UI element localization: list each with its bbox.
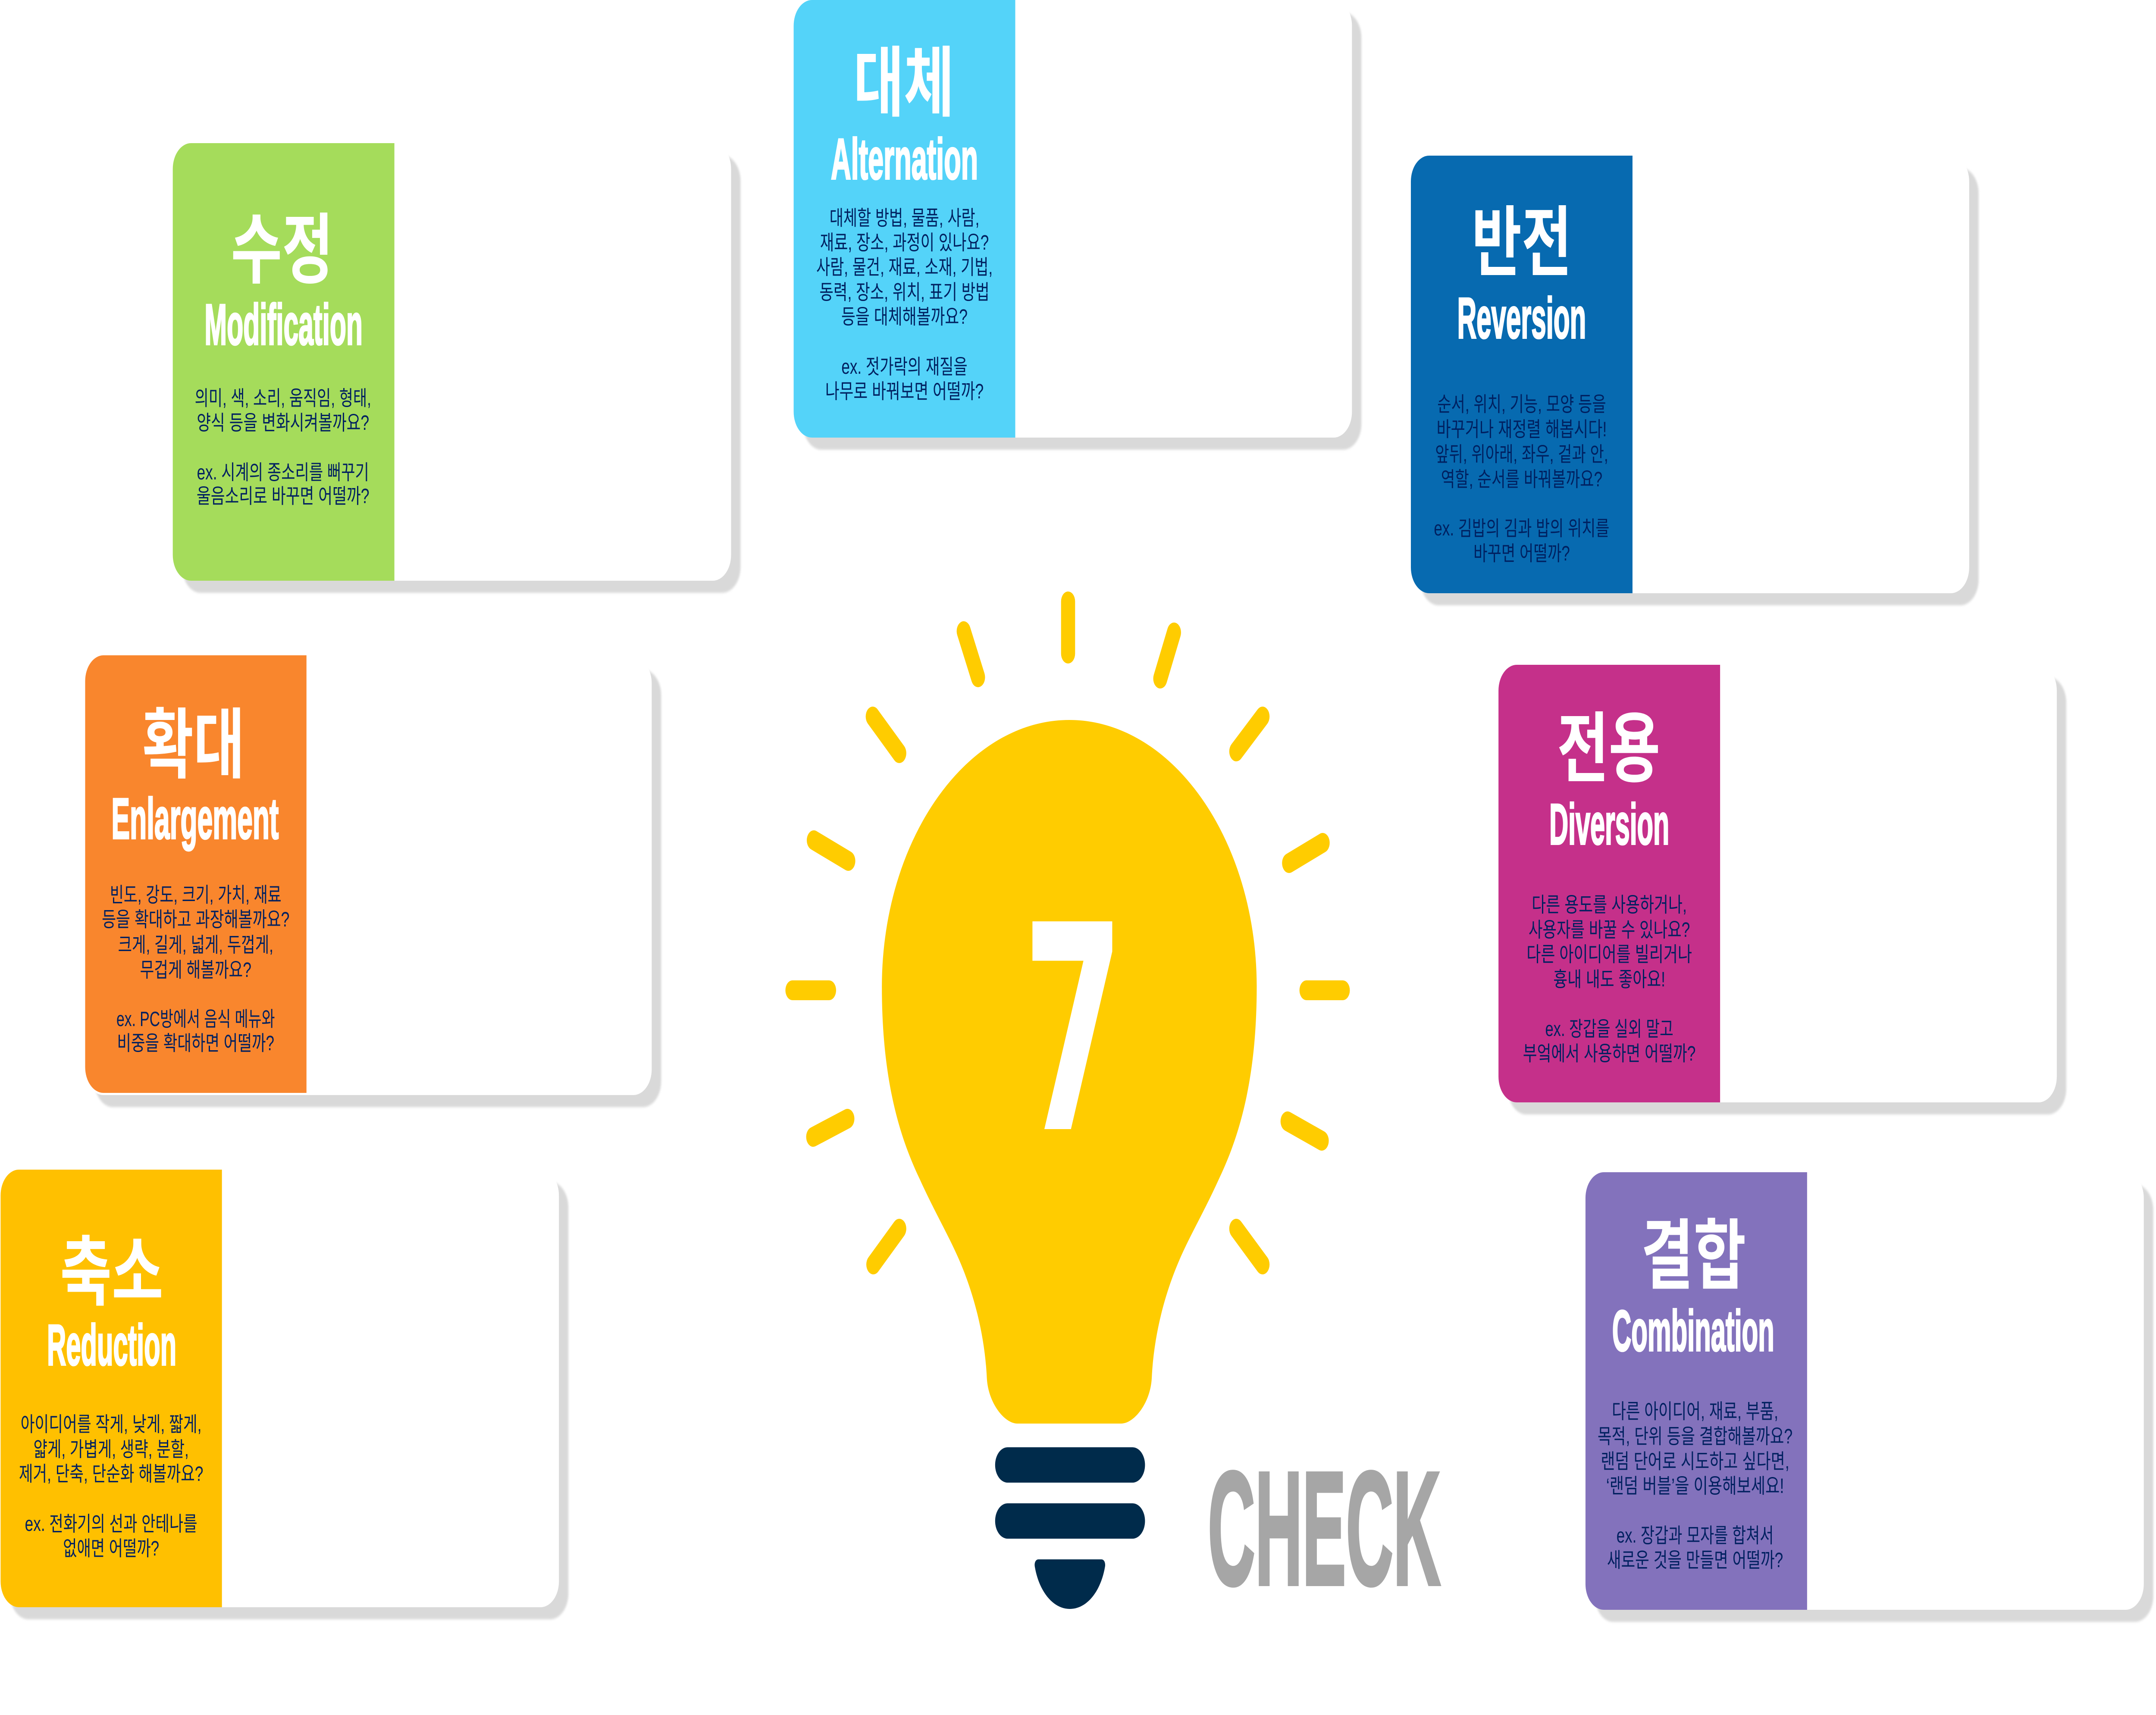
text block: Combination description <box>1598 1399 1792 1571</box>
text block: Modification description: ex. 시계의 종소리를 뻐꾸기 <box>197 460 369 484</box>
text block: Alternation description: 등을 대체해볼까요? <box>841 305 968 328</box>
text block: Combination description: 랜덤 단어로 시도하고 싶다면, <box>1601 1449 1789 1473</box>
text block: Modification description <box>195 386 371 507</box>
heading: 확대: 확대 <box>142 702 244 788</box>
text block: Enlargement description: 빈도, 강도, 크기, 가치, 재료 <box>110 883 282 906</box>
colour block: Alternation <box>794 0 1015 438</box>
heading: 수정: 수정 <box>231 207 333 293</box>
colour block: Enlargement <box>85 655 307 1093</box>
text block: Combination description: ex. 장갑과 모자를 합쳐서 <box>1617 1524 1774 1547</box>
text block: Combination description: 새로운 것을 만들면 어떨까? <box>1607 1548 1783 1571</box>
bulb base <box>995 1447 1145 1609</box>
text block: Reduction description <box>19 1412 203 1560</box>
bulb rays <box>793 601 1343 1264</box>
panel: Reversion card <box>1411 156 1979 605</box>
text block: Reversion description: 앞뒤, 위아래, 좌우, 겉과 안, <box>1435 442 1608 466</box>
panel: Diversion card <box>1498 665 2066 1114</box>
colour block: Combination <box>1586 1172 1807 1610</box>
subheading: Alternation: Alternation <box>831 127 978 191</box>
text block: Diversion description: 다른 아이디어를 빌리거나 <box>1526 942 1692 966</box>
subheading: Diversion: Diversion <box>1549 792 1669 857</box>
text block: Reduction description: 없애면 어떨까? <box>63 1537 159 1560</box>
text block: Enlargement description: ex. PC방에서 음식 메뉴와 <box>116 1007 275 1030</box>
heading: 반전: 반전 <box>1472 200 1572 286</box>
text block: Reversion description: 바꾸거나 재정렬 해봅시다! <box>1436 417 1607 441</box>
subheading: Reversion: Reversion <box>1457 286 1586 351</box>
icon: light bulb <box>793 601 1343 1609</box>
text block: Modification description: 울음소리로 바꾸면 어떨까? <box>197 484 370 507</box>
subheading: Enlargement: Enlargement <box>111 786 279 851</box>
text block: Reduction description: 제거, 단축, 단순화 해볼까요? <box>19 1462 203 1485</box>
label: CHECK: CHECK <box>1208 1438 1441 1619</box>
text block: Alternation description: 동력, 장소, 위치, 표기 방법 <box>819 280 990 304</box>
text block: Diversion description: 사용자를 바꿀 수 있나요? <box>1529 918 1690 941</box>
text block: Reversion description: 바꾸면 어떨까? <box>1473 541 1570 565</box>
text block: Diversion description: 다른 용도를 사용하거나, <box>1532 893 1687 916</box>
heading: 전용: 전용 <box>1557 706 1660 792</box>
text block: Reversion description <box>1434 392 1609 565</box>
text block: Reversion description: 역할, 순서를 바꿔볼까요? <box>1441 467 1602 491</box>
text block: Alternation description: ex. 젓가락의 재질을 <box>841 355 968 378</box>
panel: Reduction card <box>0 1170 568 1619</box>
text block: Alternation description <box>816 206 993 403</box>
bulb glass <box>882 720 1257 1424</box>
text block: Diversion description <box>1523 893 1695 1065</box>
text block: Reduction description: 아이디어를 작게, 낮게, 짧게, <box>21 1412 202 1436</box>
text block: Reduction description: ex. 전화기의 선과 안테나를 <box>25 1512 197 1535</box>
panel: Alternation card <box>794 0 1361 450</box>
text block: Enlargement description: 비중을 확대하면 어떨까? <box>117 1031 274 1055</box>
text block: Alternation description: 대체할 방법, 물품, 사람, <box>830 206 979 229</box>
subheading: Reduction: Reduction <box>47 1313 176 1377</box>
panel: Enlargement card <box>85 655 661 1107</box>
heading: 축소: 축소 <box>60 1229 163 1315</box>
text block: Enlargement description: 크게, 길게, 넓게, 두껍게, <box>118 933 273 956</box>
text block: Enlargement description: 무겁게 해볼까요? <box>140 958 251 981</box>
text block: Combination description: 다른 아이디어, 재료, 부품, <box>1612 1399 1778 1423</box>
text block: Reversion description: ex. 김밥의 김과 밥의 위치를 <box>1434 516 1609 540</box>
subheading: Modification: Modification <box>204 292 363 357</box>
heading: 결합: 결합 <box>1641 1213 1746 1299</box>
text block: Enlargement description <box>102 883 289 1055</box>
text block: Diversion description: 부엌에서 사용하면 어떨까? <box>1523 1042 1695 1065</box>
panel: Modification card <box>173 143 740 593</box>
text block: Reduction description: 얇게, 가볍게, 생략, 분할, <box>34 1437 189 1461</box>
text block: Combination description: ‘랜덤 버블’을 이용해보세요! <box>1606 1474 1784 1497</box>
number: 7: 7 <box>1023 864 1124 1196</box>
text block: Modification description: 의미, 색, 소리, 움직임, 형태, <box>195 386 371 410</box>
text block: Diversion description: 흉내 내도 좋아요! <box>1553 967 1665 991</box>
colour block: Reduction <box>0 1170 222 1607</box>
colour block: Diversion <box>1498 665 1720 1102</box>
heading: 대체: 대체 <box>853 40 954 126</box>
text block: Enlargement description: 등을 확대하고 과장해볼까요? <box>102 908 289 931</box>
text block: Modification description: 양식 등을 변화시켜볼까요? <box>197 411 369 434</box>
text block: Diversion description: ex. 장갑을 실외 말고 <box>1545 1017 1673 1040</box>
subheading: Combination: Combination <box>1612 1299 1774 1363</box>
colour block: Reversion <box>1411 156 1633 593</box>
text block: Reversion description: 순서, 위치, 기능, 모양 등을 <box>1437 392 1606 416</box>
text block: Alternation description: 나무로 바꿔보면 어떨까? <box>825 379 984 403</box>
panel: Combination card <box>1586 1172 2153 1622</box>
text block: Alternation description: 사람, 물건, 재료, 소재, 기법, <box>816 255 993 279</box>
colour block: Modification <box>173 143 395 581</box>
text block: Combination description: 목적, 단위 등을 결합해볼까요? <box>1598 1424 1792 1448</box>
text block: Alternation description: 재료, 장소, 과정이 있나요? <box>820 231 989 254</box>
